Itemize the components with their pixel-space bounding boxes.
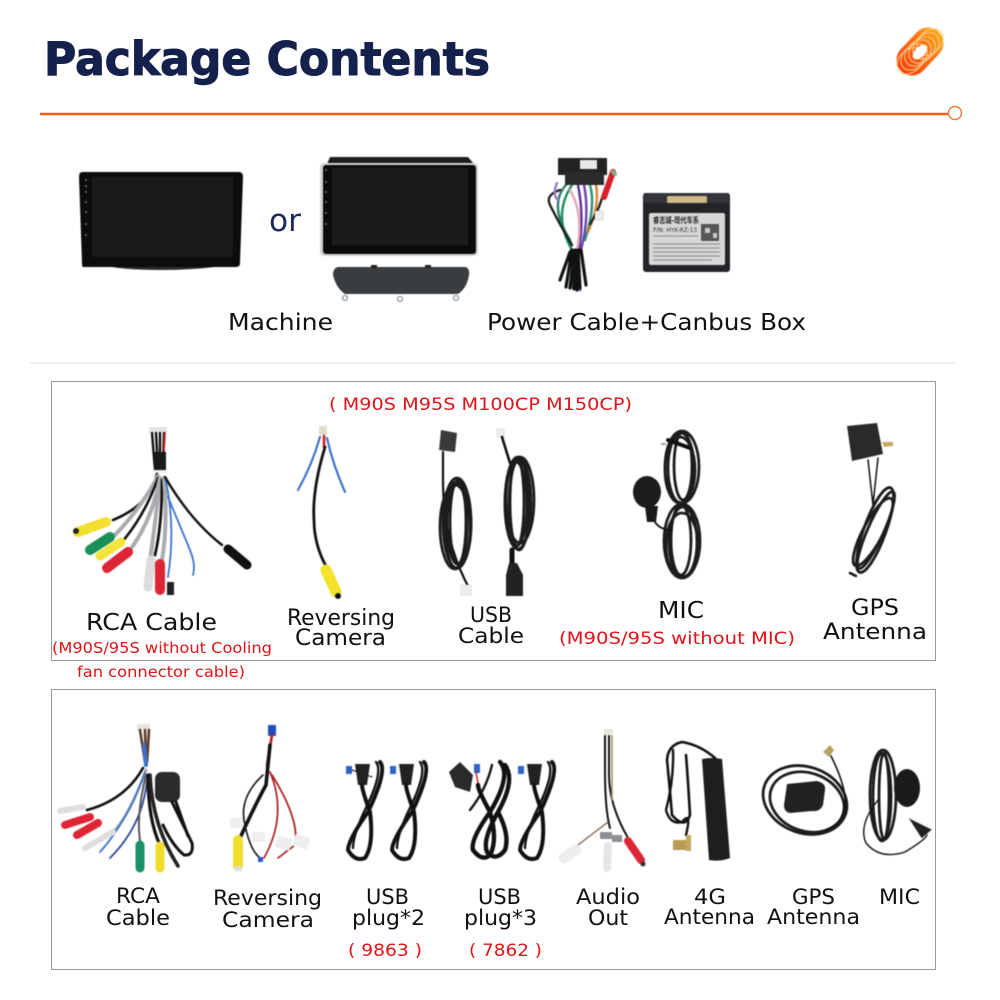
machine option one: [79, 172, 243, 270]
label: USB plug x2: [348, 885, 425, 961]
reversing camera cable image: [230, 725, 310, 871]
label: RCA cable: [106, 884, 170, 930]
label: audio out: Out: [588, 906, 628, 930]
label: GPS antenna: GPS: [851, 596, 899, 621]
label: 4G antenna: [664, 885, 755, 929]
label: audio out: [576, 885, 640, 930]
panel: other model accessories: [52, 690, 936, 970]
label: USB plug x3: ( 7862 ): [469, 941, 542, 961]
label: reversing camera: Reversing: [287, 606, 395, 631]
machine option two with lower panel: [320, 157, 478, 301]
MIC note: (M90S/95S without MIC): [559, 629, 795, 649]
label: RCA cable: Cable: [106, 906, 170, 930]
GPS antenna image: [846, 423, 901, 576]
label: reversing camera: Camera: [222, 908, 314, 932]
label: USB plug x3: [464, 885, 542, 961]
RCA cable image: [60, 724, 192, 868]
microphone image: [633, 431, 700, 578]
label: RCA cable: RCA Cable: [86, 610, 217, 636]
4G antenna image: [666, 742, 730, 861]
label: USB plug x3: USB: [478, 885, 521, 909]
label: machine: Machine: [228, 310, 333, 336]
USB plug triple image: [449, 762, 554, 859]
or text: or: [269, 203, 301, 239]
label: USB cable: USB: [470, 603, 512, 627]
label: USB plug x2: ( 9863 ): [348, 941, 422, 961]
label: USB plug x2: USB: [366, 885, 409, 909]
label: USB cable: Cable: [458, 624, 524, 648]
panel heading: ( M90S M95S M100CP M150CP): [329, 395, 632, 415]
label: GPS antenna: [767, 885, 860, 929]
USB cable image: [439, 429, 534, 596]
label: MIC: MIC: [658, 598, 704, 624]
label: 4G antenna: Antenna: [664, 905, 755, 929]
header rule: [40, 106, 962, 120]
label: MIC: MIC: [879, 885, 920, 909]
USB plug pair image: [346, 762, 426, 859]
label: USB cable: [458, 603, 524, 648]
icon: orange coil logo: [892, 24, 948, 79]
label: GPS antenna: [823, 596, 927, 645]
label: GPS antenna: GPS: [792, 885, 835, 909]
label: GPS antenna: Antenna: [823, 620, 927, 645]
reversing camera cable image: [298, 426, 345, 599]
label: 4G antenna: 4G: [694, 885, 726, 909]
power cable harness: [549, 158, 615, 290]
label: power cable and canbus box: Power Cable+Canbus Box: [487, 310, 806, 336]
label: reversing camera: [213, 886, 322, 932]
label: RCA cable: RCA: [116, 884, 161, 908]
canbus box: 睿志诚-现代车系: [653, 215, 699, 225]
audio out cable image: [564, 729, 646, 868]
GPS antenna image: [753, 745, 857, 846]
RCA note line two: fan connector cable): [77, 663, 245, 681]
label: reversing camera: [287, 606, 395, 651]
RCA note line one: (M90S/95S without Cooling: [52, 639, 272, 657]
microphone image: [864, 750, 929, 855]
canbus box: [643, 193, 730, 272]
canbus box: P/N: HYK-RZ-13: [653, 226, 697, 234]
label: GPS antenna: Antenna: [767, 905, 860, 929]
label: reversing camera: Camera: [295, 626, 386, 651]
label: USB plug x3: plug*3: [464, 906, 537, 930]
label: USB plug x2: plug*2: [352, 906, 425, 930]
RCA cable image: [73, 427, 247, 595]
label: reversing camera: Reversing: [213, 886, 322, 910]
title: Package Contents: [44, 32, 490, 86]
panel: M90S series accessories: [52, 382, 936, 681]
label: audio out: Audio: [576, 885, 640, 909]
